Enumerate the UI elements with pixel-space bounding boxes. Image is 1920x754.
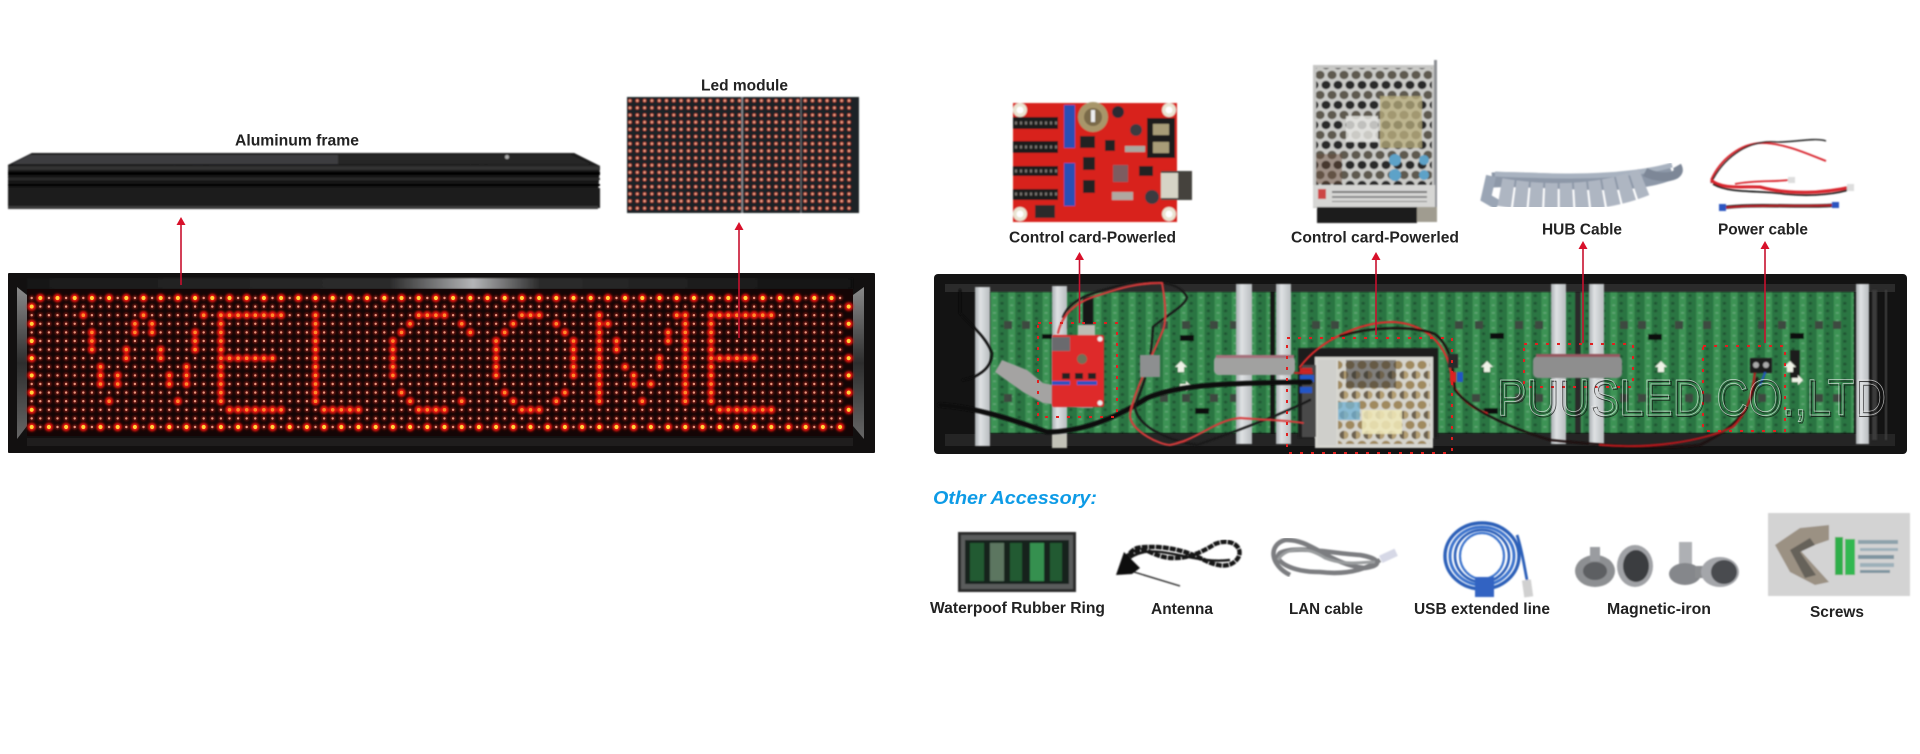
power cable photo [1711, 140, 1854, 211]
LED dot matrix [32, 298, 849, 427]
back panel photo [934, 274, 1907, 454]
power supply product photo [1313, 60, 1437, 223]
label: Control card-Powerled: Control card-Powerled [1009, 230, 1176, 246]
arrow: HUB cable [1578, 241, 1588, 343]
accessory: magnetic iron [1575, 542, 1739, 587]
arrow: power cable [1760, 241, 1770, 343]
HUB cable photo [1486, 165, 1678, 205]
label: Waterpoof Rubber Ring: Waterpoof Rubber Ring [930, 600, 1105, 617]
label: HUB Cable: HUB Cable [1542, 222, 1622, 238]
control card in panel [1052, 297, 1104, 407]
label: LAN cable: LAN cable [1289, 601, 1363, 618]
arrow: frame [176, 217, 186, 285]
label: Control card-Powerled (power supply): Control card-Powerled [1291, 230, 1459, 246]
label: USB extended line: USB extended line [1414, 601, 1550, 618]
arrow: module [734, 222, 744, 338]
heading: Aluminum frame: Aluminum frame [235, 132, 359, 150]
wires and cables [940, 282, 1772, 447]
control card product photo [1013, 102, 1192, 222]
power supply in panel [1298, 348, 1438, 448]
green LED boards [990, 292, 1854, 433]
aluminum frame product photo [8, 153, 600, 209]
accessory: waterproof rubber ring [958, 532, 1076, 592]
metal rails [975, 284, 1887, 448]
label: Screws: Screws [1810, 604, 1864, 621]
front display panel showing WELCOME [8, 273, 875, 453]
arrow: control card [1075, 252, 1084, 323]
LED module photo [627, 97, 859, 213]
arrow: power supply [1372, 252, 1380, 335]
accessory: LAN cable [1274, 540, 1398, 575]
heading: Other Accessory: Other Accessory: [933, 487, 1097, 508]
heading: Led module: Led module [701, 78, 788, 94]
red dotted highlight boxes [1038, 323, 1785, 453]
accessory: screws [1768, 513, 1910, 596]
ribbon cables [995, 354, 1622, 408]
label: Power cable: Power cable [1718, 222, 1808, 238]
accessory: antenna [1116, 542, 1240, 586]
accessory: USB extended line [1445, 523, 1533, 597]
label: Magnetic-iron: Magnetic-iron [1607, 601, 1711, 618]
label: Antenna: Antenna [1151, 601, 1213, 618]
